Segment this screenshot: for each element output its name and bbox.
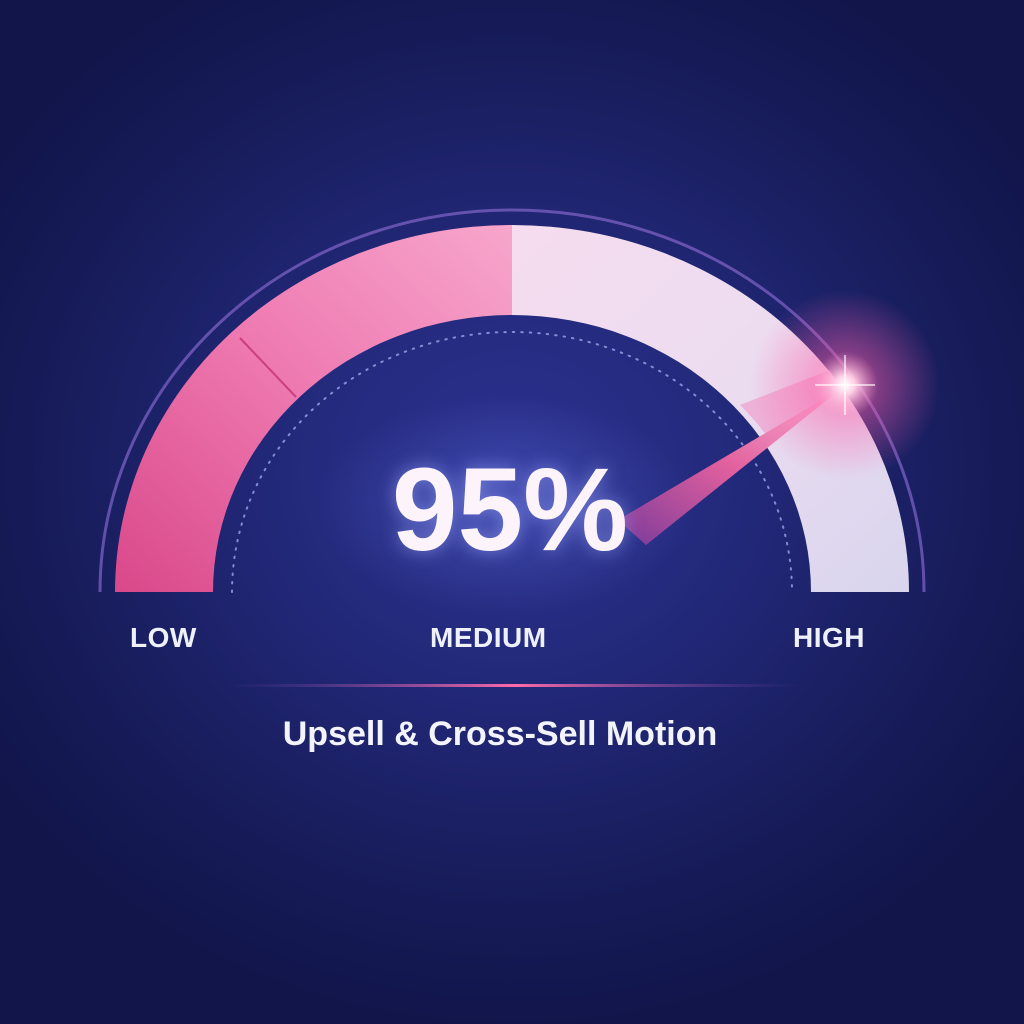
label: HIGH: HIGH — [793, 622, 865, 653]
label: MEDIUM: MEDIUM — [430, 622, 547, 653]
label: LOW: LOW — [130, 622, 197, 653]
subtitle: Upsell & Cross-Sell Motion — [283, 715, 717, 753]
needle — [618, 388, 842, 545]
outer thin ring — [100, 210, 924, 592]
segment: low/medium pink — [115, 225, 512, 592]
percentage value: 95% — [392, 444, 628, 576]
pink tint near needle — [740, 370, 840, 440]
glow at needle tip — [750, 290, 940, 480]
text glow — [315, 395, 695, 615]
divider line — [230, 684, 800, 687]
dotted inner arc — [232, 332, 792, 592]
segment: high light — [512, 225, 909, 592]
